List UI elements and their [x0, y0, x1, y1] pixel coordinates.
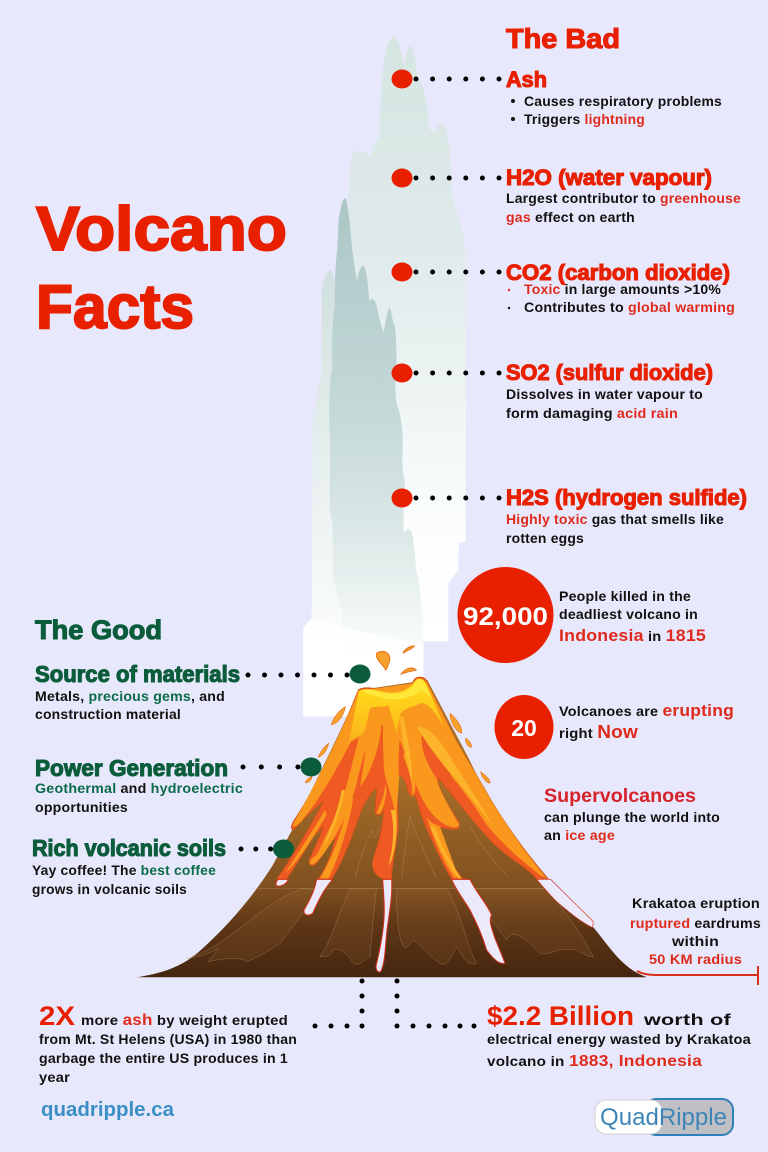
- benefit: power generation: [35, 755, 322, 815]
- benefit: rich volcanic soils: Rich volcanic soils: [32, 835, 226, 861]
- light highlights: [323, 717, 493, 867]
- fact: ash: Ash: [506, 67, 547, 92]
- callout: 20: [494, 695, 734, 759]
- stat: 2x more ash: from Mt. St Helens (USA) in 1980 than: [39, 1031, 297, 1047]
- stat: 2x more ash: [39, 1001, 297, 1085]
- callout: 92,000: [458, 567, 706, 663]
- stat: 2.2 billion: worth of: [643, 1012, 732, 1029]
- callout: krakatoa eruption: ruptured eardrums: [630, 915, 761, 931]
- heading: the bad: The Bad: [506, 23, 620, 54]
- smoke plume: [303, 36, 466, 716]
- callout: krakatoa eruption: 50 KM radius: [649, 951, 742, 967]
- fact: h2s: rotten eggs: [506, 530, 584, 546]
- stat: 2x more ash: year: [39, 1069, 70, 1085]
- benefit: rich volcanic soils: [32, 835, 294, 897]
- fact: h2s: Highly toxic gas that smells like: [506, 511, 724, 527]
- stat: 2x more ash: more ash by weight erupted: [81, 1012, 288, 1029]
- fact: h2o: H2O (water vapour): [506, 165, 712, 190]
- fact: co2: Toxic in large amounts >10%: [524, 281, 721, 297]
- fact: h2o: gas effect on earth: [506, 209, 635, 225]
- fact: so2: SO2 (sulfur dioxide): [506, 360, 713, 385]
- amber streams: [285, 682, 547, 878]
- mountain body: [137, 680, 647, 977]
- callout: krakatoa eruption: Krakatoa eruption: [632, 895, 760, 911]
- fact: co2: Contributes to global warming: [524, 299, 735, 315]
- lava flows: [277, 677, 548, 879]
- stat: 2x more ash: garbage the entire US produces in 1: [39, 1050, 288, 1066]
- benefit: rich volcanic soils: Yay coffee! The best coffee: [32, 862, 216, 878]
- callout: 20: Volcanoes are erupting: [559, 701, 734, 720]
- upper splashes: [376, 646, 416, 674]
- heading: the good: The Good: [35, 615, 162, 645]
- deep orange silhouette: [277, 677, 548, 879]
- logo: quadripple: [595, 1099, 733, 1135]
- rock detail: [187, 888, 593, 964]
- callout: krakatoa eruption: [630, 895, 761, 967]
- fact: co2: CO2 (carbon dioxide): [506, 260, 730, 285]
- benefit: power generation: Geothermal and hydroelectric: [35, 780, 243, 796]
- callout: supervolcanoes: [544, 786, 720, 843]
- fact: so2: Dissolves in water vapour to: [506, 386, 703, 402]
- fact: ash: [506, 67, 722, 127]
- callout: supervolcanoes: can plunge the world into: [544, 809, 720, 825]
- logo: quadripple: QuadRipple: [600, 1104, 727, 1131]
- benefit: source of materials: Source of materials: [35, 661, 240, 687]
- website: quadripple.ca: [41, 1099, 175, 1121]
- stat: 2.2 billion: electrical energy wasted by Krakatoa: [487, 1031, 751, 1047]
- benefit: power generation: opportunities: [35, 799, 128, 815]
- benefit: source of materials: [35, 661, 370, 722]
- lava splashes: [305, 707, 490, 783]
- callout: 92,000: deadliest volcano in: [559, 606, 698, 622]
- volcano: [137, 646, 647, 977]
- callout: 20: 20: [511, 715, 537, 741]
- title: Volcano: [36, 195, 287, 264]
- yellow crater: [348, 679, 443, 747]
- fact: co2: [506, 260, 735, 315]
- fact: h2s: H2S (hydrogen sulfide): [506, 485, 747, 510]
- callout: 92,000: Indonesia in 1815: [559, 626, 706, 645]
- callout: supervolcanoes: Supervolcanoes: [544, 786, 696, 807]
- benefit: source of materials: Metals, precious gems, and: [35, 688, 225, 704]
- fact: so2: form damaging acid rain: [506, 405, 678, 421]
- radius line: [637, 966, 758, 985]
- callout: 92,000: People killed in the: [559, 588, 691, 604]
- stat: 2.2 billion: [487, 1001, 751, 1070]
- fact: so2: [506, 360, 713, 421]
- bottom dotted connectors: [312, 978, 476, 1028]
- benefit: rich volcanic soils: grows in volcanic soils: [32, 881, 187, 897]
- stat: 2.2 billion: volcano in 1883, Indonesia: [487, 1053, 702, 1070]
- fact: h2o: Largest contributor to greenhouse: [506, 190, 741, 206]
- callout: supervolcanoes: an ice age: [544, 827, 615, 843]
- title: Facts: [36, 273, 194, 342]
- fact: ash: Causes respiratory problems: [524, 93, 722, 109]
- callout: 92,000: 92,000: [463, 603, 548, 631]
- fact: ash: Triggers lightning: [524, 111, 645, 127]
- callout: krakatoa eruption: within: [671, 933, 719, 949]
- callout: 20: right Now: [559, 722, 639, 742]
- benefit: power generation: Power Generation: [35, 755, 228, 781]
- stat: 2x more ash: 2X: [39, 1001, 75, 1031]
- title: [36, 195, 287, 342]
- fact: h2o: [506, 165, 741, 225]
- cut-out lava streaks: [276, 879, 593, 972]
- stat: 2.2 billion: $2.2 Billion: [487, 1001, 634, 1031]
- red markers and dotted leaders: [392, 70, 500, 508]
- benefit: source of materials: construction material: [35, 706, 181, 722]
- fact: h2s: [506, 485, 747, 546]
